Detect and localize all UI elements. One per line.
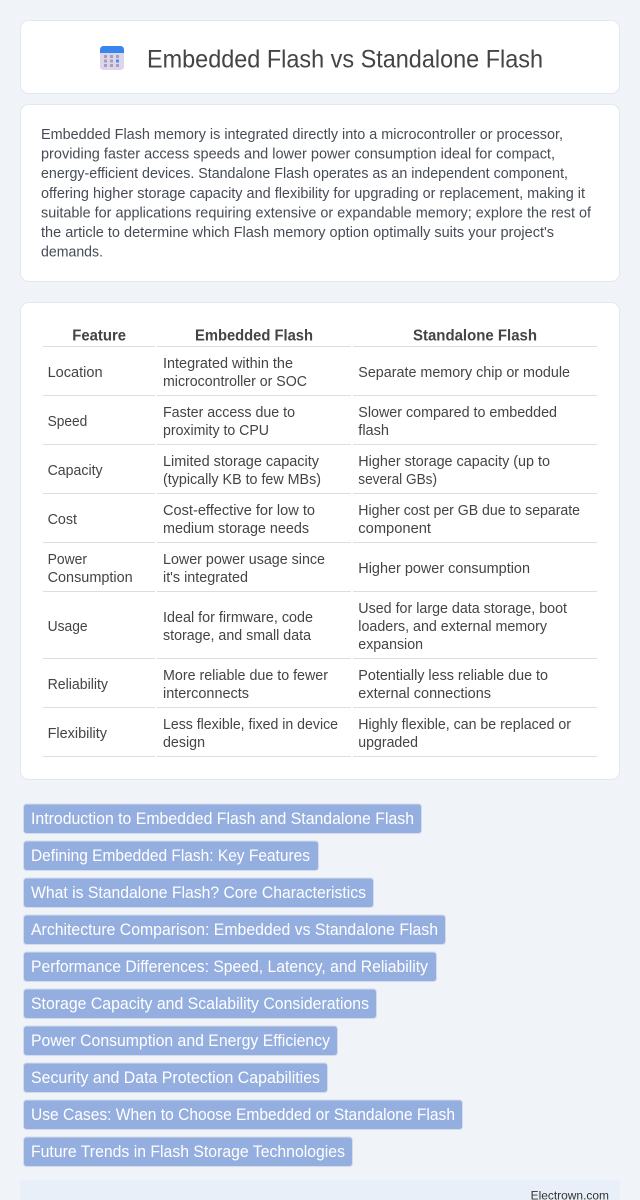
row: reliability bbox=[48, 668, 548, 702]
list: article topics bbox=[24, 804, 462, 1166]
row: cost: Cost bbox=[48, 512, 77, 528]
row: power consumption: Higher power consumption bbox=[358, 561, 530, 577]
row: flexibility: Flexibility bbox=[48, 726, 108, 742]
row: usage: expansion bbox=[358, 637, 423, 653]
table header: Feature bbox=[72, 328, 126, 344]
row: capacity: (typically KB to few MBs) bbox=[163, 472, 321, 488]
row: capacity bbox=[48, 454, 550, 488]
row: location: Integrated within the bbox=[163, 356, 293, 372]
topic tag 5 bbox=[24, 952, 436, 982]
row: usage: Ideal for firmware, code bbox=[163, 610, 313, 626]
row: flexibility: upgraded bbox=[358, 735, 418, 751]
row: usage: storage, and small data bbox=[163, 628, 311, 644]
topic tag 4 bbox=[24, 915, 446, 944]
row: capacity: Limited storage capacity bbox=[163, 454, 320, 470]
row: flexibility: Less flexible, fixed in device bbox=[163, 717, 338, 733]
row: capacity: Capacity bbox=[48, 463, 103, 479]
row: cost: component bbox=[358, 521, 431, 537]
row: power consumption: it's integrated bbox=[163, 570, 248, 586]
topic tag 6: Storage Capacity and Scalability Considerations bbox=[31, 995, 369, 1013]
row: capacity: Higher storage capacity (up to bbox=[358, 454, 550, 470]
topic tag 1: Introduction to Embedded Flash and Standalone Flash bbox=[31, 810, 414, 828]
row: cost: Cost-effective for low to bbox=[163, 503, 315, 519]
table header bbox=[72, 328, 537, 344]
row: cost: Higher cost per GB due to separate bbox=[358, 503, 580, 519]
row: speed: flash bbox=[358, 423, 389, 439]
topic tag 10: Future Trends in Flash Storage Technologies bbox=[31, 1143, 345, 1161]
text block: introduction paragraph bbox=[41, 127, 592, 261]
topic tag 3 bbox=[24, 878, 374, 908]
text block: introduction paragraph: providing faster access speeds and lower power consumption ideal for compact, bbox=[41, 147, 555, 163]
row: speed: Faster access due to bbox=[163, 405, 295, 421]
topic tag 9: Use Cases: When to Choose Embedded or Standalone Flash bbox=[31, 1106, 455, 1124]
panel: comparison table bbox=[20, 302, 620, 780]
footer bbox=[20, 1180, 620, 1200]
row: speed bbox=[48, 405, 557, 439]
row: power consumption: Lower power usage since bbox=[163, 552, 325, 568]
row: reliability: interconnects bbox=[163, 686, 249, 702]
row: cost: medium storage needs bbox=[163, 521, 309, 537]
topic tag 9 bbox=[24, 1100, 462, 1130]
row: location bbox=[48, 356, 570, 390]
topic tag 7: Power Consumption and Energy Efficiency bbox=[31, 1032, 331, 1050]
text block: introduction paragraph: Embedded Flash memory is integrated directly into a microcontroller or processor, bbox=[41, 127, 563, 143]
topic tag 3: What is Standalone Flash? Core Characteristics bbox=[31, 884, 366, 902]
panel: introduction bbox=[20, 104, 620, 282]
title: Embedded Flash vs Standalone Flash bbox=[147, 46, 543, 74]
icon: calendar bbox=[100, 46, 124, 70]
row: reliability: More reliable due to fewer bbox=[163, 668, 328, 684]
row: power consumption: Consumption bbox=[48, 570, 133, 586]
row: usage bbox=[48, 601, 567, 653]
row: location: microcontroller or SOC bbox=[163, 374, 307, 390]
row: flexibility: design bbox=[163, 735, 205, 751]
table header: Embedded Flash bbox=[195, 328, 313, 344]
topic tag 8 bbox=[24, 1063, 328, 1092]
topic tag 6 bbox=[24, 989, 376, 1018]
table header: Standalone Flash bbox=[413, 328, 537, 344]
row: power consumption: Power bbox=[48, 552, 87, 568]
row: cost bbox=[48, 503, 580, 537]
row: reliability: Reliability bbox=[48, 677, 109, 693]
topic tag 4: Architecture Comparison: Embedded vs Standalone Flash bbox=[31, 921, 438, 939]
topic tag 1 bbox=[24, 804, 422, 834]
row: power consumption bbox=[48, 552, 530, 586]
row: reliability: external connections bbox=[358, 686, 491, 702]
topic tag 8: Security and Data Protection Capabilities bbox=[31, 1069, 320, 1087]
row: speed: proximity to CPU bbox=[163, 423, 269, 439]
panel: title card bbox=[20, 20, 620, 94]
row: reliability: Potentially less reliable due to bbox=[358, 668, 548, 684]
row: usage: Usage bbox=[48, 619, 88, 635]
topic tag 2 bbox=[24, 841, 318, 870]
topic tag 5: Performance Differences: Speed, Latency, and Reliability bbox=[31, 958, 429, 976]
row: usage: Used for large data storage, boot bbox=[358, 601, 567, 617]
text block: introduction paragraph: offering higher storage capacity and flexibility for upgrading or replacement, making it bbox=[41, 186, 585, 202]
row: location: Location bbox=[48, 365, 103, 381]
row: location: Separate memory chip or module bbox=[358, 365, 570, 381]
text block: introduction paragraph: the article to determine which Flash memory option optimally suits your project's bbox=[41, 225, 554, 241]
text block: introduction paragraph: demands. bbox=[41, 245, 103, 261]
topic tag 10 bbox=[24, 1137, 352, 1166]
row: speed: Slower compared to embedded bbox=[358, 405, 557, 421]
topic tag 7 bbox=[24, 1026, 338, 1056]
row: flexibility: Highly flexible, can be replaced or bbox=[358, 717, 571, 733]
row: flexibility bbox=[48, 717, 571, 751]
row: usage: loaders, and external memory bbox=[358, 619, 548, 635]
row: speed: Speed bbox=[48, 414, 87, 430]
topic tag 2: Defining Embedded Flash: Key Features bbox=[31, 847, 310, 865]
text block: introduction paragraph: energy-efficient devices. Standalone Flash operates as an independent component, bbox=[41, 166, 568, 182]
text block: introduction paragraph: suitable for applications requiring extensive or expandable memory; explore the rest of bbox=[41, 205, 592, 221]
row: capacity: several GBs) bbox=[358, 472, 437, 488]
